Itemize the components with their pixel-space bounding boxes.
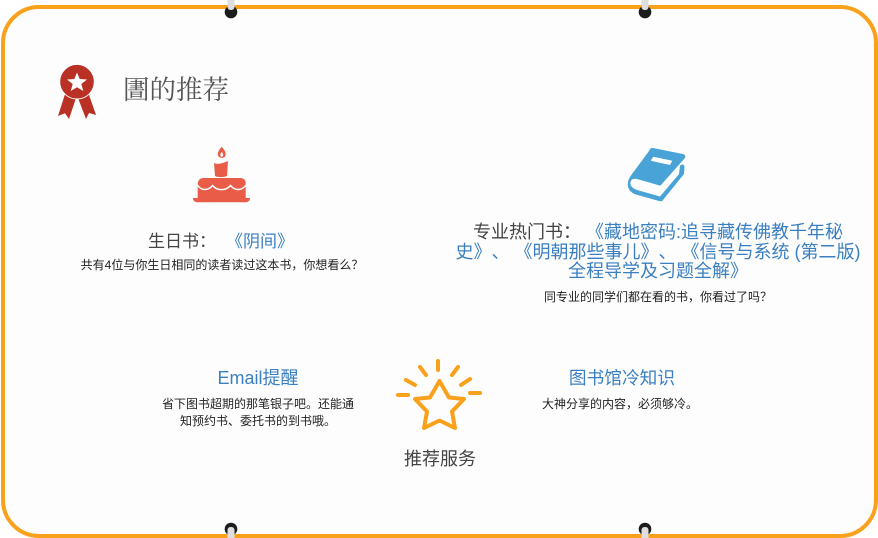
heading: email reminder: Email提醒: [217, 368, 298, 388]
text block: email reminder: [162, 368, 354, 428]
icon: birthday cake: [193, 146, 250, 202]
description: birthday book: 共有4位与你生日相同的读者读过这本书，你想看么？: [81, 258, 363, 272]
description: major hot books: 同专业的同学们都在看的书，你看过了吗？: [544, 290, 772, 304]
text block: major hot books: [456, 222, 860, 304]
heading: major hot books: 专业热门书： 《藏地密码:追寻藏传佛教千年秘: [473, 222, 843, 242]
text block: library trivia: [542, 368, 698, 411]
heading: major hot books: 史》、 《明朝那些事儿》、 《信号与系统 (第二版): [456, 242, 860, 262]
icon: shining star: [396, 359, 482, 430]
icon: award ribbon: [58, 64, 96, 119]
binding ring: bottom right: [638, 522, 652, 538]
text block: birthday book: [81, 232, 363, 272]
binding ring: top right: [638, 0, 652, 18]
description: email reminder: 省下图书超期的那笔银子吧。还能通: [162, 397, 354, 411]
icon: blue book: [628, 148, 686, 202]
heading: library trivia: 图书馆冷知识: [569, 368, 675, 388]
description: email reminder: 知预约书、委托书的到书哦。: [180, 414, 336, 428]
binding ring: top left: [224, 0, 238, 18]
binding ring: bottom left: [224, 522, 238, 538]
description: library trivia: 大神分享的内容，必须够冷。: [542, 397, 698, 411]
heading: major hot books: [456, 222, 860, 281]
title: 圕的推荐: [123, 75, 229, 105]
description: email reminder: [162, 397, 354, 428]
heading: major hot books: 全程导学及习题全解》: [568, 261, 748, 281]
heading: birthday book: 生日书： 《阴间》: [148, 232, 294, 251]
caption: recommendation service: 推荐服务: [404, 449, 476, 469]
